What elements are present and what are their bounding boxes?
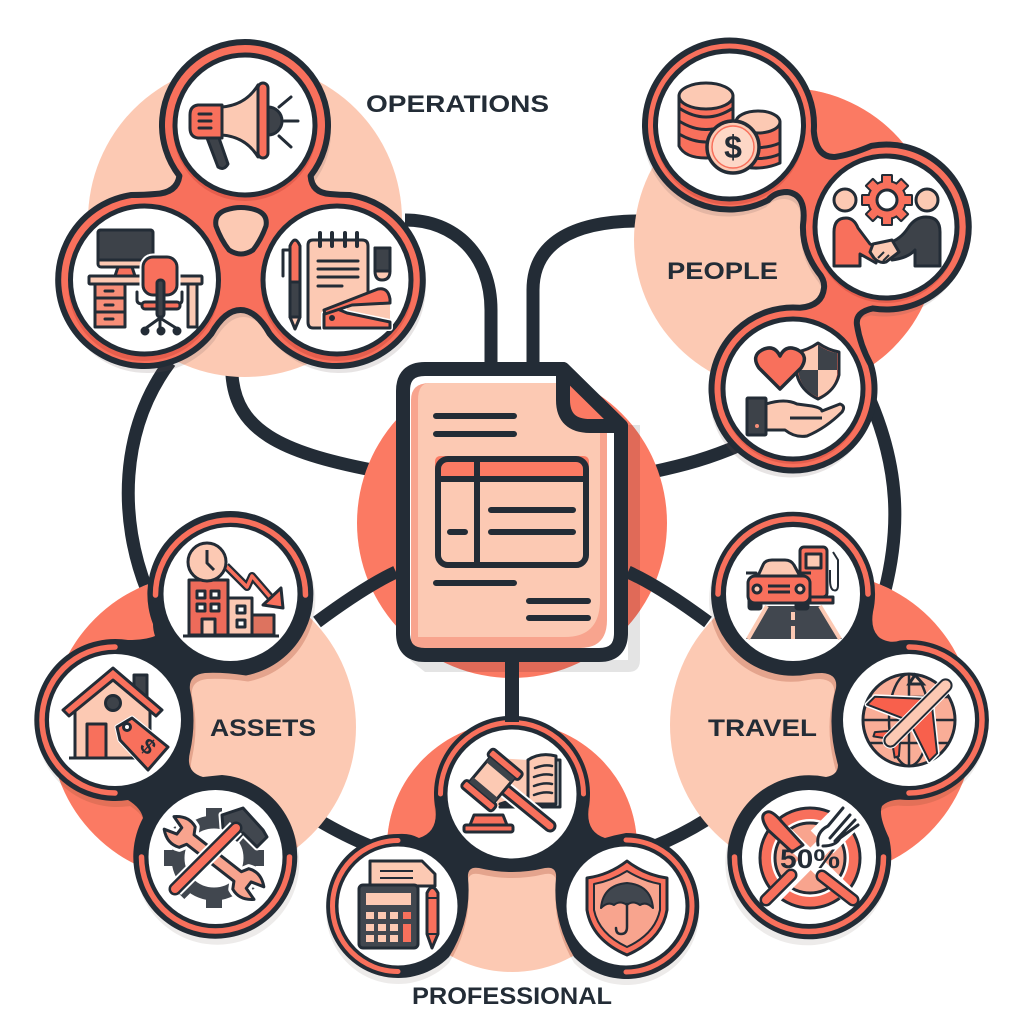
document coral circle (357, 368, 667, 678)
operations background circle (88, 63, 402, 377)
heading: travel: TRAVEL (708, 715, 817, 742)
people cluster shadow (643, 48, 967, 477)
professional background circle (387, 722, 637, 972)
assets cluster shadow (36, 517, 315, 945)
assets peach-side shadow (58, 618, 313, 848)
document drop shadow (410, 425, 640, 672)
operations white discs (70, 55, 411, 354)
professional dark frame (326, 716, 699, 979)
heading: people: PEOPLE (667, 258, 778, 285)
icon: plate, knife and fork with 50 percent (760, 808, 860, 908)
travel coral half (872, 582, 965, 860)
people white discs (656, 51, 957, 459)
professional cluster shadow (326, 722, 699, 985)
travel coral arcs (718, 519, 982, 932)
panel: operations (58, 42, 426, 377)
operations cluster shadow (61, 49, 426, 373)
professional coral top (388, 730, 636, 838)
icon: handshake with gear (834, 174, 940, 266)
document folded corner (563, 369, 621, 426)
professional peach-side shadow (434, 806, 590, 957)
assets dark frame (34, 511, 313, 939)
people background circle (634, 88, 938, 392)
icon: coin stacks with dollar (679, 83, 780, 173)
icon: megaphone (190, 83, 298, 168)
assets white discs (49, 527, 298, 924)
icon: car, fuel pump and road (746, 547, 842, 639)
operations coral frame (58, 42, 423, 366)
assets coral half (58, 584, 155, 864)
coin dollar sign: $ (724, 129, 742, 165)
central document (317, 368, 708, 722)
icon: heart and shield over hand (747, 340, 844, 436)
panel: professional (326, 700, 699, 985)
travel background circle (670, 573, 974, 877)
professional coral arcs (332, 722, 692, 972)
icon: house with price tag (63, 668, 168, 770)
icon: pen, notepad, eraser and stapler (283, 233, 390, 329)
operations frame centre hole (216, 208, 266, 254)
assets coral arcs (42, 520, 306, 931)
travel white discs (726, 527, 975, 924)
people coral half (810, 90, 924, 364)
icon: wrench and hammer over gear (160, 808, 268, 908)
travel peach-side shadow (712, 618, 964, 844)
panel: travel (670, 512, 989, 946)
assets background circle (50, 574, 356, 880)
icon: office desk and chair (89, 230, 202, 334)
heading: professional: PROFESSIONAL (412, 983, 612, 1010)
people inner shading (654, 55, 958, 464)
document text lines and table (435, 416, 589, 618)
house tag dollar sign: $ (135, 733, 161, 760)
icon: airplane over globe (862, 672, 956, 768)
panel: people (634, 41, 1000, 477)
travel cluster shadow (709, 518, 987, 945)
travel dark frame (711, 512, 989, 939)
icon: clock, buildings and falling arrow (183, 543, 283, 636)
heading: operations: OPERATIONS (366, 91, 549, 118)
icon: calculator, paper and pencil (359, 861, 438, 948)
people coral frame (645, 41, 969, 470)
connectors over the circle (317, 572, 708, 722)
operations inner shading (68, 57, 413, 361)
connector lines behind circles (128, 220, 895, 846)
professional white discs (338, 730, 686, 966)
document page (403, 369, 621, 655)
heading: assets: ASSETS (210, 715, 316, 742)
icon: gavel and law book (461, 748, 560, 832)
icon: insurance shield with umbrella (587, 861, 667, 955)
panel: assets (34, 511, 356, 945)
plate percent label: 50% (780, 844, 840, 874)
